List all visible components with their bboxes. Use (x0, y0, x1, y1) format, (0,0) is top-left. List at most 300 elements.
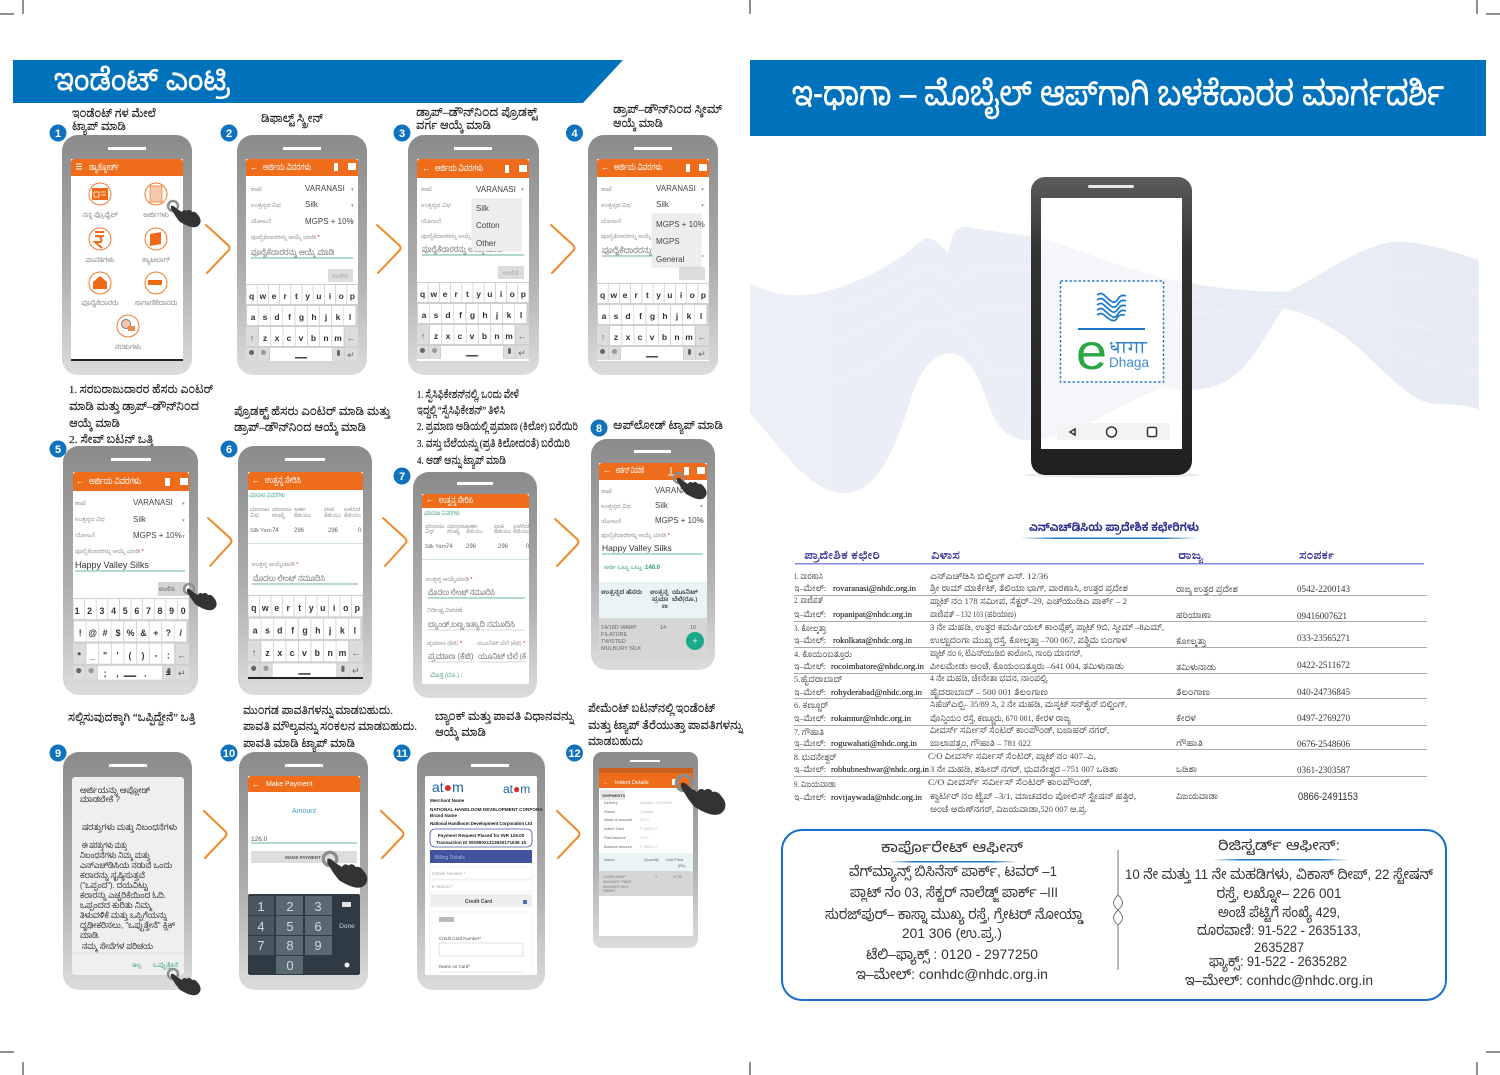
dropdown: product category: Silk (476, 204, 490, 213)
phone: step 2 default screen: ಪೂರೈಕೆದಾರರನ್ನು ಆಯ್ಕೆ ಮಾಡಿ (251, 248, 334, 259)
phone: step 5 supplier name and save: VARANASI (133, 498, 173, 507)
panel: office addresses (782, 830, 1446, 1000)
dropdown: scheme (652, 214, 705, 267)
phone: step 10 make payment: 4 (257, 919, 265, 934)
dropdown: product category (472, 199, 521, 251)
phone: step 7 product quantity and price: ಮಾರಾಟ (447, 523, 467, 530)
step captions: ಸಲ್ಲಿಸುವುದಕ್ಕಾಗಿ “ಒಪ್ಪಿದ್ದೇನೆ” ಒತ್ತಿ (68, 712, 196, 726)
phone: step 3 product category dropdown: ↵ (518, 348, 526, 358)
phone: step 8 upload: ಯೋಜನೆ (601, 518, 621, 525)
registered office: ರಸ್ತೆ, ಲಖ್ನೋ– 226 001 (1216, 885, 1342, 904)
right banner: user guide (750, 60, 1486, 136)
phone: step 6 product name: ಸಂಖ್ಯೆ (272, 512, 286, 520)
phone: step 4 scheme dropdown: ↑← (601, 332, 706, 342)
table header: ಸಂಪರ್ಕ (1299, 550, 1335, 562)
row: Bhubaneswar (794, 752, 1351, 776)
regional offices heading: ಎನ್‌ಎಚ್‌ಡಿಸಿಯ ಪ್ರಾದೇಶಿಕ ಕಛೇರಿಗಳು (1029, 521, 1199, 535)
row: Kolkata (794, 623, 1350, 647)
phone: step 1 home menu: ಡ್ಯಾಶ್ಬೋರ್ಡ್ (89, 162, 119, 174)
step number badges: 12 (568, 748, 581, 760)
phone: step 11 payment gateway: Credit Card (465, 899, 492, 905)
row: Coimbatore: ಪೀಲಮೇಡು ಅಂಚೆ, ಕೊಯಂಬತ್ತೂರು –641 004, ತಮಿಳುನಾಡು (930, 662, 1124, 672)
phone: step 12 indent details: MULBURY TWIST (603, 880, 633, 884)
phone: step 12 indent details: MULBURY SILK (603, 885, 629, 889)
phone: step 12 indent details: ₹ 10000.0 (640, 827, 657, 831)
phone: step 4 scheme dropdown: ಅರ್ಜಿಯ ವಿವರಗಳು (614, 162, 662, 172)
phone: step 5 supplier name and save: ▾ (182, 534, 185, 540)
row: Hyderabad: ಹೈದರಾಬಾದ್ – 500 001 ತೆಲಂಗಾಣ (930, 688, 1048, 699)
phone: step 2 default screen: ← (250, 162, 258, 172)
phone: step 5 supplier name and save: 1234567890 (75, 606, 186, 616)
row: Vijayawada: ವಿಜಯವಾಡಾ (1176, 792, 1218, 801)
step captions: ಪಾವತಿ ಮಾಡಿ ಟ್ಯಾಪ್ ಮಾಡಿ (243, 738, 355, 752)
phone: step 2 default screen: ಯೋಜನೆ (251, 218, 271, 225)
row: Panipat: 2. ಪಾಣಿಪತ್ (794, 596, 823, 605)
phone: step 12 indent details: 14/16D WARP (603, 875, 626, 879)
phone: step 7 product quantity and price: ಮೊತ್ತ (ರೂ.) : (430, 671, 463, 679)
row: Hyderabad: ತೆಲಂಗಾಣ (1176, 688, 1210, 697)
phone: step 7 product quantity and price: 296 (466, 544, 477, 550)
row: Kolkata: ಕೋಲ್ಕತ್ತಾ (1176, 637, 1207, 647)
phone: step 10 make payment: 8 (286, 938, 294, 953)
phone: step 11 payment gateway: Billing Details (435, 855, 466, 861)
phone: step 12 indent details (593, 752, 725, 948)
step captions: ಬ್ಯಾಂಕ್ ಮತ್ತು ಪಾವತಿ ವಿಧಾನವನ್ನು (435, 711, 575, 725)
logo: eDhaga: धागा (1109, 337, 1148, 357)
phone: step 5 supplier name and save: ಯೋಜನೆ (75, 532, 95, 539)
phone: step 7 product quantity and price: 296 (498, 544, 509, 550)
phone: step 5 supplier name and save: ಉಳಿಸಿ (159, 586, 176, 593)
phone: step 4 scheme dropdown: ▾ (701, 203, 704, 209)
step number badges: 11 (396, 748, 408, 760)
phone: step 4 scheme dropdown: ↵ (698, 349, 706, 359)
registered office: ಅಂಚೆ ಪೆಟ್ಟಿಗೆ ಸಂಖ್ಯೆ 429, (1218, 904, 1340, 923)
corporate office: ಸುರಜ್‌ಪುರ್– ಕಾಸ್ನಾ ಮುಖ್ಯ ರಸ್ತೆ, ಗ್ರೇಟರ್ ನೋಯ್ಡಾ (825, 906, 1084, 925)
row: Kannur: ಸಿಹೆಚ್ಎಲ್ಪಿ– 35/89 ಸಿ, 2 ನೇ ಮಹಡಿ, ಮಸ್ಕಟ್ ಸನ್‌ಶೈನ್ ಬಿಲ್ಡಿಂಗ್, (930, 700, 1127, 711)
phone: step 6 product name: ಕೆಜಿಯು (294, 512, 311, 519)
phone: step 6 product name: 296 (294, 528, 305, 534)
row: Bhubaneswar: 8. ಭುವನೇಶ್ವರ್ (794, 753, 837, 764)
phone: step 4 scheme dropdown: Silk (656, 200, 670, 209)
step number badges: 9 (55, 748, 61, 760)
phone: step 9 terms and conditions: ಒಪ್ಪುತ್ತೇನೆ (153, 961, 179, 970)
step number badges: 2 (226, 128, 232, 140)
dropdown: product category: Other (476, 239, 496, 248)
row: Vijayawada (794, 778, 1358, 815)
row: Varanasi: ರಾಜ್ಯ ಉತ್ತರ ಪ್ರದೇಶ (1176, 585, 1238, 596)
logo: eDhaga (1060, 281, 1164, 382)
phone: step 3 product category dropdown: ಉಳಿಸಿ (503, 270, 520, 277)
step captions: ಇಂಡೆಂಟ್ ಗಳ ಮೇಲೆ (72, 108, 157, 120)
step captions: ಡ್ರಾಪ್–ಡೌನ್‌ನಿಂದ ಆಯ್ಕೆ ಮಾಡಿ (234, 422, 366, 436)
phone: step 7 product quantity and price: ಯೂನಿಟ್ ಬೆಲೆ (ಕೆಜಿ) * (477, 640, 526, 647)
row: Bhubaneswar: 3 ನೇ ಮಹಡಿ, ಶಹೀದ್ ನಗರ್, ಭುವನೇಶ್ವರ –751 007 ಒಡಿಶಾ (930, 765, 1118, 776)
phone: step 11 payment gateway: Merchant Name (430, 798, 465, 803)
chevron arrows between steps (204, 225, 580, 858)
phone: step 8 upload: Silk (655, 501, 669, 510)
phone: step 4 scheme dropdown: ಉತ್ಪನ್ನದ ವಿಧ (601, 202, 631, 210)
phone: step 8 upload: 14/16D WARP (601, 625, 637, 631)
phone: step 8 upload: MULBURY SILK (601, 646, 641, 652)
phone: step 6 product name: Silk Yarn (250, 528, 272, 534)
phone: step 12 indent details: Indent Details (615, 780, 649, 786)
step number badges (50, 124, 608, 762)
phone: step 3 product category dropdown: qwertyuiop (420, 289, 526, 299)
phone: step 7 product quantity and price: ಬ್ಯಾಂಡ್,ಬಣ್ಣ,ಇತ್ಯಾದಿ ನಮೂದಿಸಿ (428, 620, 515, 631)
step number badges: 10 (223, 748, 235, 760)
table header: ರಾಜ್ಯ (1178, 551, 1205, 564)
phone: step 4 scheme dropdown: VARANASI (656, 184, 696, 193)
phone: step 6 product name: ↑← (252, 647, 360, 658)
phone: step 6 product name: ಮಾರಾಟ (250, 506, 270, 513)
phone: step 9 terms and conditions: ನಿಬಂಧನೆಗಳು ನಿಮ್ಮ ಮತ್ತು (80, 851, 150, 862)
phone: step 8 upload: ಉತ್ಪನ್ನದ ವಿಧ (601, 503, 631, 511)
row: Vijayawada: ಅಂಚೆ ಅರುಣ್‌ನಗರ್, ವಿಜಯವಾಡಾ,520 007 ಆ.ಪ್ರ. (930, 805, 1087, 815)
phone: step 4 scheme dropdown: ← (601, 162, 610, 172)
row: Vijayawada: 9. ವಿಜಯವಾಡಾ (794, 780, 836, 789)
phone: step 11 payment gateway: E-Mail Id * (432, 884, 453, 889)
row: Hyderabad (794, 674, 1351, 699)
phone: step 7 product quantity and price: ವಿಧ (425, 528, 434, 535)
phone: step 10 make payment: Make Payment (266, 781, 313, 788)
phone: step 2 default screen (237, 135, 367, 375)
phone: step 9 terms and conditions: ಇಲ್ಲ (132, 963, 142, 970)
phone: step 4 scheme dropdown: zxcvbnm (614, 332, 693, 342)
phone: step 11 payment gateway: at●m (432, 779, 464, 795)
phone: step 9 terms and conditions: ಎನ್‌ಎಚ್‌ಡಿಸಿಯ ನಡುವೆ ಒಂದು (80, 861, 172, 870)
phone: step 1 home menu: ಪಾವತಿಗಳು (86, 256, 115, 264)
row: Guwahati: 7. ಗೌಹಾತಿ (794, 728, 824, 737)
phone: step 7 product quantity and price: 0 (526, 544, 530, 550)
phone: step 4 scheme dropdown: ಯೋಜನೆ (601, 218, 621, 225)
row: Vijayawada: rovijaywada@nhdc.org.in (831, 793, 922, 802)
phone: step 12 indent details: Mode of account (604, 818, 633, 822)
row: Kolkata: ಉಲ್ಟಾದಂಗಾ ಮುಖ್ಯ ರಸ್ತೆ, ಕೋಲ್ಕತ್ತಾ –700 067, ಪಶ್ಚಿಮ ಬಂಗಾಳ (930, 636, 1127, 647)
phone: step 11 payment gateway: Brand Name (430, 813, 458, 818)
row: Varanasi: ಎನ್‌ಎಚ್‌ಡಿಸಿ ಬಿಲ್ಡಿಂಗ್ ಎಸ್. 12/36 (930, 572, 1048, 582)
phone: step 1 home menu: ಸರಕುಗಳು (115, 343, 142, 351)
phone: step 12 indent details: FABRIC (603, 889, 616, 893)
phone: step 7 product quantity and price: ಪ್ರಮಾಣ (ಕೆಜಿ) * (427, 640, 463, 647)
phone: step 4 scheme dropdown (588, 135, 718, 375)
step captions: 1. ಸ್ಪೆಸಿಫಿಕೇಶನ್‌ನಲ್ಲಿ, ಒಂದು ವೇಳೆ (417, 389, 519, 403)
row: Guwahati: ಇ–ಮೇಲ್: (794, 739, 826, 748)
phone: step 3 product category dropdown: ಶಾಖೆ (421, 186, 432, 193)
phone: step 7 product quantity and price: ಕೆಜಿಯು (466, 528, 483, 535)
phone: step 3 product category dropdown (408, 135, 539, 375)
phone: step 6 product name: zxcvbnm (265, 648, 346, 658)
phone: step 11 payment gateway: National Handloom Development Corporation Ltd (430, 821, 532, 826)
step captions: ಡ್ರಾಪ್–ಡೌನ್‌ನಿಂದ ಸ್ಕೀಮ್ (613, 104, 722, 118)
registered office: ಫ್ಯಾಕ್ಸ್: 91-522 - 2635282 (1209, 953, 1347, 972)
phone: step 11 payment gateway: Mobile Number * (432, 871, 466, 876)
row: Panipat: ಹರಿಯಾಣಾ (1176, 611, 1211, 620)
phone: step 7 product quantity and price: ಉತ್ಪನ್ನ ಸೇರಿಸಿ (439, 495, 473, 507)
phone: step 8 upload: ಉತ್ಪನ್ನ (650, 588, 670, 597)
corporate office: ಪ್ಲಾಟ್ ನಂ 03, ಸೆಕ್ಟರ್ ನಾಲೆಡ್ಜ್ ಪಾರ್ಕ್ –III (850, 884, 1058, 903)
row: Hyderabad: rohyderabad@nhdc.org.in (831, 688, 922, 697)
row: Varanasi: ಇ–ಮೇಲ್: (794, 584, 826, 593)
phone: step 7 product quantity and price: ನಿರ್ದಿಷ್ಟ ವಿವರಣೆ (427, 607, 463, 615)
phone: step 9 terms and conditions (63, 752, 201, 995)
registered office (1125, 837, 1434, 988)
step captions: ಮತ್ತು ಟ್ಯಾಪ್ ತೆರೆಯುತ್ತಾ ಪಾವತಿಗಳನ್ನು (588, 720, 744, 734)
phone: step 6 product name: ಕೆಜಿಯು (324, 512, 341, 519)
phone: step 9 terms and conditions: ಒಪ್ಪಂದದ ಕುರಿತು ನಿಮ್ಮ (80, 901, 153, 912)
phone: step 3 product category dropdown: ಪೂರೈಕೆದಾರರನ್ನು ಆಯ್ಕೆ ಮಾಡಿ (422, 245, 502, 256)
phone: step 8 upload: + (692, 636, 698, 646)
phone: step 5 supplier name and save: Silk (133, 515, 147, 524)
phone: step 8 upload: ಅರ್ಜಿ ಒಟ್ಟು ಒಟ್ಟು : (604, 565, 646, 572)
step number badges: 6 (226, 444, 232, 456)
phone: step 12 indent details: Unit Price (666, 857, 684, 862)
phone: step 8 upload: ಣ (662, 604, 668, 610)
phone: step 6 product name: ಅರ್ಹ (294, 506, 307, 513)
phone: step 2 default screen: Silk (305, 200, 319, 209)
phone: step 3 product category dropdown: asdfghjkl (422, 310, 522, 320)
phone: step 8 upload: ▾ (700, 519, 703, 525)
phone: step 5 supplier name and save: MGPS + 10% (133, 531, 182, 540)
phone: step 6 product name: ↵ (352, 665, 360, 676)
phone: step 8 upload: ಪೂರೈಕೆದಾರರನ್ನು ಆಯ್ಕೆ ಮಾಡಿ * (601, 532, 671, 540)
row: Hyderabad: ಇ–ಮೇಲ್: (794, 688, 826, 697)
phone: step 12 indent details: PO.3 (640, 818, 649, 822)
step number badges: 4 (571, 128, 578, 140)
registered office: ದೂರವಾಣಿ: 91-522 - 2635133, (1197, 922, 1361, 938)
phone: step 4 scheme dropdown: qwertyuiop (600, 290, 706, 300)
row: Kolkata: 3 ನೇ ಮಹಡಿ, ಉತ್ತರ ಕಮರ್ಷಿಯಲ್ ಕಾಂಪ್ಲೆಕ್ಸ್, ಪ್ಲಾಟ್ 9ಬಿ, ಸ್ಕೀಮ್ –8ಎಮ್, (930, 623, 1164, 633)
row: Coimbatore (794, 649, 1350, 672)
row: Coimbatore: ಪ್ಲಾಟ್ ನಂ 6, ಟಿಎನ್‌ಯುಡಿಬಿ ಕಾಲೋನಿ, ಗಾಂಧಿ ಮಾನಗರ್, (930, 649, 1082, 659)
phone: step 12 indent details: 4 (655, 875, 657, 879)
row: Hyderabad: 040-24736845 (1297, 687, 1351, 697)
row: Varanasi: 0542-2200143 (1297, 584, 1351, 594)
row: Coimbatore: ತಮಿಳುನಾಡು (1176, 663, 1216, 672)
row: Bhubaneswar: 0361-2303587 (1297, 765, 1351, 775)
table header (795, 550, 1424, 564)
row: Panipat: ropanipat@nhdc.org.in (833, 610, 912, 619)
phone: step 8 upload: ಯೂನಿಟ್ (672, 588, 698, 596)
phone: step 10 make payment: 1 (257, 899, 265, 914)
step captions: 2. ಸೇವ್ ಬಟನ್ ಒತ್ತಿ (69, 434, 154, 447)
step captions: ಮುಂಗಡ ಪಾವತಿಗಳನ್ನು ಮಾಡಬಹುದು. (243, 705, 393, 719)
phone: step 9 terms and conditions: ಅರ್ಜಿಯನ್ನು ಅಪ್ಲೋಡ್ (80, 786, 150, 796)
phone: step 8 upload: ▾ (700, 504, 703, 510)
phone: step 6 product name: asdfghjkl (253, 625, 356, 636)
phone: step 7 product quantity and price: ಮಾರಾಟ ವಿವರಗಳು (424, 509, 461, 517)
phone: step 5 supplier name and save: !@#$%&+?/ (79, 628, 182, 638)
step captions: ಪ್ರೊಡಕ್ಟ್ ಹೆಸರು ಎಂಟರ್ ಮಾಡಿ ಮತ್ತು (234, 406, 391, 420)
table header: ವಿಳಾಸ (931, 550, 960, 562)
row: Hyderabad: 4 ನೇ ಮಹಡಿ, ಚೇನೇತಾ ಭವನ, ನಾಂಪಲ್ಲಿ, (930, 674, 1048, 684)
phone: step 8 upload: TWISTED (601, 639, 626, 645)
step number badges: 3 (399, 128, 405, 140)
phone: step 2 default screen: ▾ (351, 187, 354, 193)
step captions: ಪೇಮೆಂಟ್ ಬಟನ್‌ನಲ್ಲಿ ಇಂಡೆಂಟ್ (588, 703, 715, 717)
step number badges: 5 (55, 444, 61, 456)
phone: step 12 indent details: Paid Amount (604, 836, 626, 840)
phone: step 2 default screen: ಉತ್ಪನ್ನದ ವಿಧ (251, 202, 281, 210)
phone: step 7 product quantity and price: ಕೆಜಿಯು (513, 528, 530, 535)
phone: step 7 product quantity and price: ಕೆಜಿಯು (494, 528, 511, 535)
phone: step 6 product name: ಮಾರಾಟ (272, 506, 292, 513)
divider ornament (1114, 850, 1122, 970)
phone: step 6 product name: ← (252, 475, 260, 485)
corporate office: ಟೆಲಿ–ಫ್ಯಾಕ್ಸ್ : 0120 - 2977250 (866, 946, 1038, 965)
phone: step 6 product name: ಮೊದಲು ಲೇಂಟ್ ನಮೂದಿಸಿ (253, 574, 325, 583)
phone: step 6 product name: ವಿಧ (250, 512, 259, 519)
phone: step 3 product category dropdown: ↑← (421, 331, 526, 341)
phone: step 9 terms and conditions: ಕರಾರನ್ನು ಎಚ್ಚರಿಕೆಯಿಂದ ಓದಿ. (80, 891, 166, 901)
phone: step 9 terms and conditions: ಕರಾರನ್ನು ಸೃಷ್ಠಿಸುತ್ತವೆ (80, 871, 146, 882)
step captions: 1. ಸರಬರಾಜುದಾರರ ಹೆಸರು ಎಂಟರ್ (69, 384, 213, 396)
phone: step 10 make payment: MAKE PAYMENT (285, 855, 321, 860)
phone: step 7 product quantity and price: ← (426, 494, 434, 504)
row: Guwahati (794, 726, 1351, 749)
phone: step 3 product category dropdown: ಅರ್ಜಿಯ ವಿವರಗಳು (435, 163, 483, 173)
step captions: 4. ಆಡ್ ಅನ್ನು ಟ್ಯಾಪ್ ಮಾಡಿ (417, 455, 506, 469)
phone: step 6 product name: ಮಾರಾಟ ವಿವರಗಳು (249, 491, 286, 499)
phone: step 5 supplier name and save: ↵ (178, 667, 186, 678)
row: Varanasi: 1. ವಾರಣಾಸಿ (794, 572, 823, 581)
phone: step 2 default screen: zxcvbnm (263, 333, 342, 343)
big phone with eDhaga logo (1024, 177, 1200, 478)
phone: step 5 supplier name and save: Happy Valley Silks (75, 560, 149, 570)
phone: step 7 product quantity and price: ಪ್ರಮಾಣ (ಕೆಜಿ) (428, 652, 474, 662)
step captions: ಪಾವತಿ ಮೌಲ್ಯವನ್ನು ಸಂಕಲನ ಮಾಡಬಹುದು. (243, 721, 417, 735)
phone: step 10 make payment: 3 (314, 899, 322, 914)
step number badges: 8 (596, 423, 602, 435)
phone: step 11 payment gateway: Payment Request Placed for INR 126.00 (438, 833, 525, 838)
registered office: 10 ನೇ ಮತ್ತು 11 ನೇ ಮಹಡಿಗಳು, ವಿಕಾಸ್ ದೀಪ್, 22 ಸ್ಟೇಷನ್ (1125, 866, 1434, 885)
phone: step 11 payment gateway: NATIONAL HANDLOOM DEVELOPMENT CORPORA (430, 807, 543, 812)
row: Vijayawada: C/O ವೀವರ್ಸ್ ಸರ್ವೀಸ್ ಸೆಂಟರ್ ಕಾಂಪೌಂಡ್, (928, 778, 1092, 787)
phone: step 12 indent details: Delivery (604, 801, 618, 805)
phone: step 6 product name: qwertyuiop (251, 603, 360, 613)
phone: step 4 scheme dropdown: ▾ (701, 187, 704, 193)
row: Kannur: 0497-2769270 (1297, 713, 1351, 723)
phone: step 11 payment gateway (417, 752, 545, 990)
row: Kannur (794, 700, 1351, 725)
phone: step 8 upload: 14 (660, 625, 666, 631)
phone: step 2 default screen: ಪೂರೈಕೆದಾರರನ್ನು ಆಯ್ಕೆ ಮಾಡಿ * (251, 234, 321, 242)
corporate office (825, 839, 1084, 982)
phone: step 4 scheme dropdown: ಪೂರೈಕೆದಾರರನ್ನು (602, 246, 653, 257)
phone: step 7 product quantity and price: ಬಾಕಿ (494, 524, 504, 530)
phone: step 4 scheme dropdown: asdfghjkl (602, 311, 702, 321)
phone: step 12 indent details: SHIPMENTS (602, 793, 626, 798)
logo: eDhaga: Dhaga (1109, 355, 1149, 370)
row: Guwahati: roguwahati@nhdc.org.in (831, 739, 917, 748)
phone: step 12 indent details: Quantity (644, 857, 659, 862)
phone: step 9 terms and conditions: ಮಾಡಬೇಕೆ ? (80, 795, 121, 804)
phone: step 2 default screen: ▾ (351, 203, 354, 209)
phone: step 4 scheme dropdown: ಶಾಖೆ (601, 186, 612, 193)
phone: step 12 indent details: (Rs) (678, 863, 686, 868)
phone: step 12 indent details: Balance Amount (604, 845, 633, 849)
row: Bhubaneswar: ಒಡಿಶಾ (1176, 765, 1197, 774)
phone: step 12 indent details: Status (604, 810, 615, 814)
row: Guwahati: ವೀವರ್ಸ್ ಸರ್ವೀಸ್ ಸೆಂಟರ್ ಕಾಂಪೌಂಡ್, ಬಜಾಹರ್ ನಗರ್, (930, 726, 1109, 735)
phone: step 12 indent details: ₹ 10000.0 (640, 845, 657, 849)
row: Hyderabad: 5.ಹೈದರಾಬಾದ್ (794, 675, 842, 686)
phone: step 9 terms and conditions: ಷರತ್ತುಗಳು ಮತ್ತು ನಿಬಂಧನೆಗಳು (82, 823, 177, 833)
navigation bar (1057, 423, 1170, 440)
row: Panipat: ಪ್ಲಾಟ್ ನಂ 178 ಸಮೀಪ, ಸೆಕ್ಟರ್–29, ಎಚ್‌ಯುಡಿಎ ಪಾರ್ಕ್ – 2 (930, 597, 1127, 607)
row: Coimbatore: 0422-2511672 (1297, 660, 1350, 670)
step captions: ಮಾಡಿ ಮತ್ತು ಡ್ರಾಪ್–ಡೌನ್‌ನಿಂದ (69, 401, 199, 414)
phone: step 8 upload: ಆರ್ಡರ್ ವಿವರಣೆ (616, 465, 644, 475)
phone: step 7 product quantity and price: ಯೂನಿಟ್ ಬೆಲೆ (ಕೆ (478, 652, 526, 661)
phone: step 9 terms and conditions: ದೃಢೀಕರಿಸಲು, "ಒಪ್ಪುತ್ತೇನೆ" ಕ್ಲಿಕ್ (80, 921, 176, 932)
phone: step 12 indent details: ← (603, 780, 609, 786)
phone: step 10 make payment: 126.0 (251, 836, 268, 843)
phone: step 10 make payment: 9 (314, 938, 322, 953)
phone: step 8 upload: VARANAS (655, 486, 693, 495)
phone: step 10 make payment: ← (252, 779, 260, 789)
phone: step 6 product name: ಉತ್ಪನ್ನ ಆಯ್ಕೆಮಾಡಿ * (252, 561, 299, 569)
phone: step 1 home menu: ಪೂರೈಕೆದಾರರು (81, 299, 119, 308)
phone: step 12 indent details: Name (604, 857, 615, 862)
step captions: ಮಾಡಬಹುದು (588, 736, 643, 748)
corporate office: ಇ–ಮೇಲ್: conhdc@nhdc.org.in (856, 966, 1048, 982)
phone: step 1 home menu (62, 135, 201, 375)
phone: step 12 indent details: 37.00 (673, 875, 682, 879)
step captions: ಟ್ಯಾಪ್ ಮಾಡಿ (72, 121, 126, 135)
left banner: indent entry (13, 60, 623, 103)
phone: step 8 upload: 140.0 (645, 565, 661, 571)
phone: step 12 indent details: ₹ 0.0 (640, 836, 649, 840)
corporate office: ವೆಗ್‌ಮ್ಯಾನ್ಸ್ ಬಿಸಿನೆಸ್ ಪಾರ್ಕ್, ಟವರ್ –1 (849, 863, 1057, 882)
row: Kannur: 6. ಕಣ್ಣೂರ್ (794, 701, 829, 712)
row: Vijayawada: ಕ್ವಾರ್ಟರ್ ನಂ ಟೈಪ್ –3/1, ಮಾಚವರಂ ಪೋಲಿಸ್ ಸ್ಟೇಷನ್ ಹತ್ತಿರ, (930, 792, 1136, 803)
row: Panipat: ಇ–ಮೇಲ್: (794, 610, 826, 619)
phone: step 1 home menu: ಕ್ಯಾಟಲಾಗ್ (142, 257, 171, 265)
phone: step 2 default screen: ↑← (250, 333, 356, 343)
phone: step 7 product quantity and price: ಅರ್ಹ (466, 523, 479, 530)
phone: step 10 make payment: 5 (286, 919, 294, 934)
phone: step 1 home menu: ಅರ್ಜಿಗಳು (143, 211, 169, 219)
phone: step 5 supplier name and save: ಉತ್ಪನ್ನದ ವಿಧ (75, 516, 105, 524)
row: Coimbatore: rocoimbatore@nhdc.org.in (831, 662, 924, 671)
phone: step 8 upload: ← (603, 465, 612, 475)
phone: step 11 payment gateway: Transaction ID WS89021313620171636 15 (436, 840, 527, 845)
banner title: ಇಂಡೆಂಟ್ ಎಂಟ್ರಿ (54, 64, 230, 99)
phone: step 11 payment gateway: Credit Card Number* (439, 936, 481, 941)
phone: step 8 upload: 10 (690, 625, 696, 631)
registered office: 2635287 (1254, 939, 1304, 955)
phone: step 8 upload: FILATURE (601, 632, 628, 638)
phone: step 9 terms and conditions: ತಿಳುವಳಿಕೆ ಮತ್ತು ಒಪ್ಪಿಗೆಯನ್ನು (80, 911, 168, 921)
phone: step 10 make payment: 7 (257, 938, 265, 953)
phone: step 7 product quantity and price: ಬಳಸಿದ (513, 523, 529, 530)
corporate office: 201 306 (ಉ.ಪ್ರ.) (902, 925, 1002, 943)
phone: step 6 product name: ಕೆಜಿಯು (344, 512, 361, 519)
phone: step 10 make payment: 2 (286, 899, 294, 914)
phone: step 6 product name: 74 (272, 528, 279, 534)
dropdown: product category: Cotton (476, 221, 500, 230)
phone: step 10 make payment: 6 (314, 919, 322, 934)
phone: step 10 make payment: Done (339, 923, 355, 930)
step captions: ಡಿಫಾಲ್ಟ್ ಸ್ಕ್ರೀನ್ (261, 113, 324, 129)
row: Kannur: ಕೇರಳ (1176, 714, 1196, 723)
dropdown: scheme: MGPS + 10% (656, 220, 705, 229)
phone: step 12 indent details: ANAND, GRAHAM (640, 801, 672, 805)
phone: step 9 terms and conditions: ಈ ಷರತ್ತುಗಳು ಮತ್ತು (82, 841, 127, 851)
step captions: ಅಪ್‌ಲೋಡ್ ಟ್ಯಾಪ್ ಮಾಡಿ (613, 420, 723, 434)
step captions: ಆಯ್ಕೆ ಮಾಡಿ (613, 118, 663, 132)
phone: step 2 default screen: ▾ (351, 219, 354, 225)
